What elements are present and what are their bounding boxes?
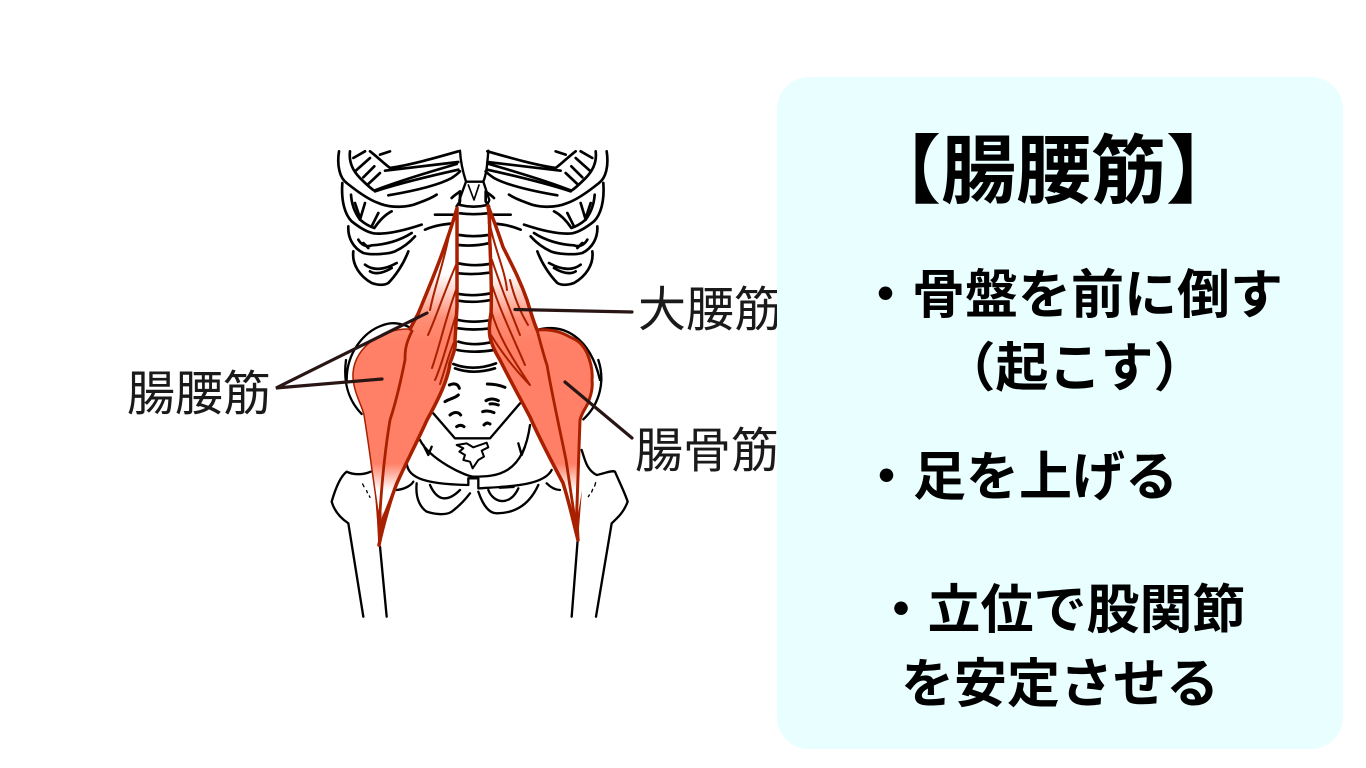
left rib cage (338, 151, 460, 285)
bullet: 骨盤を前に倒す（起こす） (859, 266, 1283, 398)
left iliopsoas muscle (353, 208, 457, 545)
iliac crests (347, 323, 600, 380)
left muscle edges (379, 208, 457, 545)
femurs (332, 450, 628, 617)
leader lines (276, 310, 632, 438)
pelvis (345, 360, 601, 419)
left muscle fibres (379, 331, 412, 530)
bullet: 立位で股関節を安定させる (874, 581, 1246, 714)
label: 腸腰筋: 腸腰筋 (127, 368, 271, 421)
label: 腸骨筋: 腸骨筋 (635, 425, 779, 478)
skeleton illustration (332, 151, 628, 617)
right muscle fibres (537, 330, 577, 530)
bullet: 骨盤を前に倒す（起こす）: （起こす） (942, 339, 1206, 398)
obturator rings (416, 483, 538, 514)
bullet: 立位で股関節を安定させる: を安定させる (901, 655, 1219, 714)
label: 大腰筋: 大腰筋 (638, 284, 782, 337)
right iliopsoas muscle (488, 206, 592, 541)
panel: summary (777, 77, 1343, 749)
xiphoid process (468, 185, 479, 200)
right muscle edges (488, 206, 578, 540)
bullet: 足を上げる: ・足を上げる (860, 448, 1178, 507)
lumbar spine (453, 205, 496, 372)
panel heading: 【腸腰筋】 (866, 129, 1241, 213)
sternum (459, 151, 489, 205)
sacral foramina (445, 384, 505, 427)
coccyx (457, 443, 488, 468)
bullet: 骨盤を前に倒す（起こす）: ・骨盤を前に倒す (859, 266, 1283, 325)
bullet: 立位で股関節を安定させる: ・立位で股関節 (874, 581, 1246, 640)
right rib cage (486, 151, 607, 285)
